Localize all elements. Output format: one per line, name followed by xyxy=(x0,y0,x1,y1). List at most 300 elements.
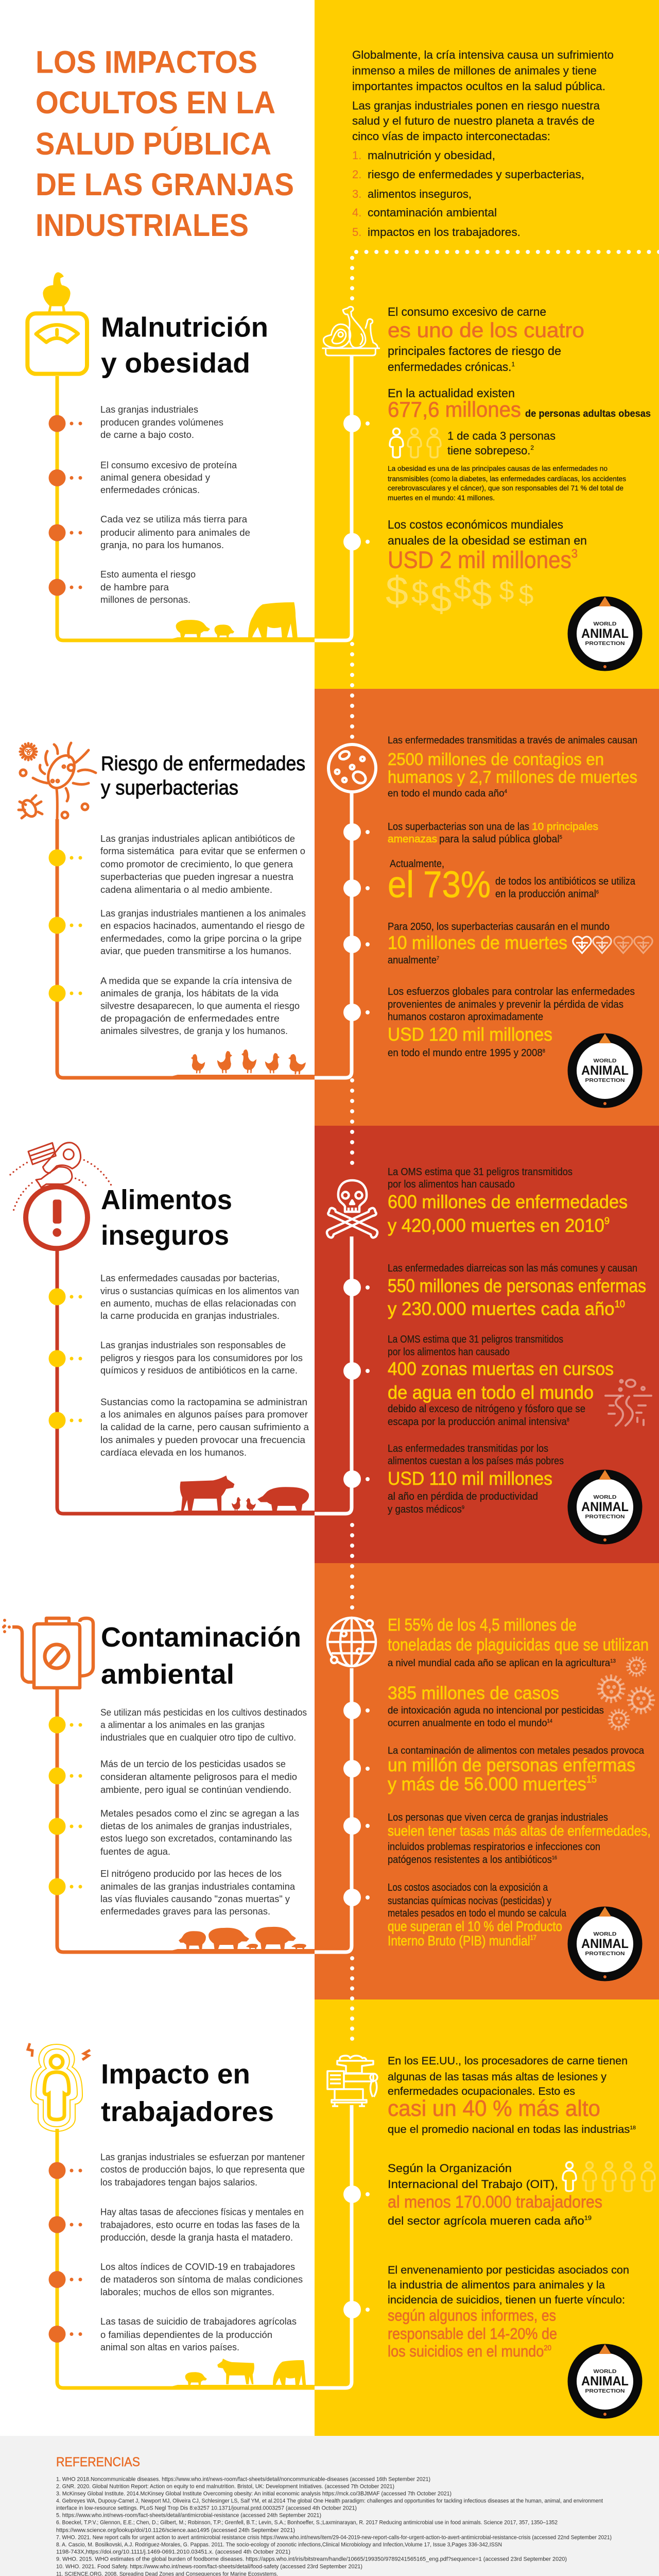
timeline: malnutrition right xyxy=(315,355,352,640)
timeline node xyxy=(343,1279,377,1296)
logo: World Animal Protection xyxy=(567,597,643,671)
point: hunger risk: Esto aumenta el riesgo xyxy=(100,569,196,580)
stat: pesticide suicides: 20 xyxy=(544,2344,551,2352)
references list: 1198-743X,https://doi.org/10.1111/j.1469-0691.2010.03451.x. (accessed 4th October 2021) xyxy=(56,2549,290,2555)
stat: foodborne hazards: 9 xyxy=(604,1216,610,1227)
stat: 73 percent antibiotics: Actualmente, xyxy=(390,858,444,870)
stat: foodborne hazards: 600 millones de enfermedades xyxy=(388,1191,628,1212)
icon: warning circle with food xyxy=(10,1143,112,1248)
timeline: workers right xyxy=(315,2105,352,2388)
dotted connector to section 3 xyxy=(350,1080,354,1173)
stat: ten million deaths xyxy=(388,921,610,966)
farm animals silhouette xyxy=(171,1476,315,1514)
heading: workers xyxy=(101,2059,274,2127)
stat: heavy metal contamination xyxy=(388,1745,644,1794)
point: heavy metals: estos luego son excretados, contaminando las xyxy=(100,1833,292,1843)
stat: cost to poorer countries: al año en pérdida de productividad xyxy=(388,1491,538,1502)
point: low wages: los trabajadores tengan bajos salarios. xyxy=(100,2177,257,2188)
stat: foodborne hazards: y 420,000 muertes en 2010 xyxy=(388,1215,613,1236)
icon: bacteria xyxy=(19,743,96,819)
intro text block: salud y el futuro de nuestro planeta a través de xyxy=(352,114,595,127)
stat: zoonotic infections: 2500 millones de contagios en xyxy=(388,750,604,769)
stat: people living near farms: Los personas que viven cerca de granjas industriales xyxy=(388,1812,608,1823)
title: DE LAS GRANJAS xyxy=(36,167,294,202)
point: foodborne illness: la carne producida en granjas industriales. xyxy=(100,1310,280,1321)
point: low cost meat xyxy=(48,404,223,440)
dotted connector to section 5 xyxy=(350,1958,354,2048)
section 2: disease and superbacteria xyxy=(19,735,652,1108)
point: nitrogen: las vías fluviales causando "zonas muertas" y xyxy=(100,1893,290,1904)
stat: meat processor injuries: algunas de las tasas más altas de lesiones y xyxy=(388,2071,607,2083)
intro numbered list: riesgo de enfermedades y superbacterias, xyxy=(368,168,584,181)
stat: farm worker deaths: 19 xyxy=(584,2214,592,2222)
heading: disease risk: y superbacterias xyxy=(101,777,238,799)
point: nitrogen: El nitrógeno producido por las heces de los xyxy=(100,1868,282,1879)
point: nitrogen: animales de las granjas industriales contamina xyxy=(100,1881,296,1892)
point: low cost meat: Las granjas industriales xyxy=(100,404,198,415)
point: pesticides on feed crops: a alimentar a los animales en las granjas xyxy=(100,1719,265,1730)
stat: cost to poorer countries: 9 xyxy=(462,1505,464,1511)
icon: dollar signs: $ xyxy=(472,574,492,614)
stat: leading risk factor: El consumo excesivo de carne xyxy=(388,305,546,318)
point: ractopamine: la calidad de la carne, pero causan sufrimiento a xyxy=(100,1421,309,1432)
intro text block: cinco vías de impacto interconectadas: xyxy=(352,130,550,143)
point: heavy metals: dietas de los animales de granjas industriales, xyxy=(100,1821,292,1831)
timeline node xyxy=(343,1702,377,1719)
stat: cost of chemical exposure: metales pesados en todo el mundo se calcula xyxy=(388,1908,567,1919)
timeline node xyxy=(343,1362,377,1380)
panel: yellow workers background xyxy=(315,1999,659,2436)
stat: heavy metal contamination: y más de 56.000 muertes xyxy=(388,1773,597,1794)
timeline node xyxy=(343,936,377,953)
stat: top ten threats: para la salud pública global xyxy=(439,834,564,845)
intro numbered list: alimentos inseguros, xyxy=(368,188,472,200)
stat: pesticide suicides: según algunos informes, es xyxy=(388,2306,556,2325)
stat: pesticide use: a nivel mundial cada año se aplican en la agricultura xyxy=(388,1658,615,1669)
heading: disease risk: Riesgo de enfermedades xyxy=(101,753,305,775)
point: physical and mental conditions: trabajadores, esto ocurre en todas las fases de la xyxy=(100,2219,300,2230)
stat: top ten threats: Los superbacterias son una de las xyxy=(388,821,529,833)
point: excess protein: El consumo excesivo de proteína xyxy=(100,460,237,470)
point: foodborne illness xyxy=(48,1273,299,1321)
icon: petri dish xyxy=(328,744,376,792)
logo: World Animal Protection xyxy=(567,2344,643,2418)
logo: World Animal Protection xyxy=(567,1906,643,1981)
timeline: food left xyxy=(57,1250,315,1514)
timeline node xyxy=(343,2185,377,2203)
small obesity note: cerebrovasculares y el cáncer), que son responsables del 71 % del total de xyxy=(388,484,623,492)
stat: global control cost: USD 120 mil millones xyxy=(388,1024,552,1045)
point: physical and mental conditions: producción, desde la granja hasta el matadero. xyxy=(100,2232,293,2243)
timeline node xyxy=(343,1760,377,1777)
intro text block: importantes impactos ocultos en la salud pública. xyxy=(352,80,605,93)
timeline node xyxy=(343,2301,377,2318)
stat: zoonotic infections xyxy=(388,735,637,799)
heading: malnutrition xyxy=(101,312,268,379)
timeline node xyxy=(343,823,377,841)
point: chemical residues: peligros y riesgos para los consumidores por los xyxy=(100,1352,303,1363)
stat: top ten threats: 10 principales xyxy=(532,821,598,833)
stat: obese adults: En la actualidad existen xyxy=(388,386,515,400)
stat: meat processor injuries xyxy=(388,2055,636,2136)
point: hunger risk xyxy=(48,569,196,605)
stat: farm worker deaths: Internacional del Trabajo (OIT), xyxy=(388,2178,558,2191)
timeline node xyxy=(343,1889,377,1906)
icon: virus particles xyxy=(597,1656,655,1731)
stat: cost to poorer countries: y gastos médicos xyxy=(388,1504,467,1515)
stat: cost of chemical exposure: Interno Bruto (PIB) mundial xyxy=(388,1933,556,1948)
icon: dollar signs: $ xyxy=(519,580,534,610)
point: foodborne illness: virus o sustancias químicas en los alimentos van xyxy=(100,1285,299,1296)
point: excess protein: animal genera obesidad y xyxy=(100,472,211,483)
stat: cost to poorer countries xyxy=(388,1443,564,1515)
point: chemical residues: Las granjas industriales son responsables de xyxy=(100,1340,286,1350)
stat: leading risk factor: es uno de los cuatro xyxy=(388,319,584,342)
stat: heavy metal contamination: La contaminación de alimentos con metales pesados provoca xyxy=(388,1745,644,1756)
logo: World Animal Protection: ANIMAL xyxy=(581,2374,629,2388)
pigs silhouette xyxy=(171,1927,315,1952)
logo: World Animal Protection: ANIMAL xyxy=(581,626,629,641)
timeline node xyxy=(343,1817,377,1835)
stat: one in three overweight: 2 xyxy=(530,444,534,451)
point: pesticides on feed crops xyxy=(48,1707,307,1742)
point: chemical residues xyxy=(48,1340,303,1376)
intro text block: Globalmente, la cría intensiva causa un sufrimiento xyxy=(352,48,614,61)
stat: top ten threats xyxy=(388,821,598,845)
point: heavy metals: fuentes de agua. xyxy=(100,1846,170,1857)
section 1: malnutrition xyxy=(27,272,651,671)
title: SALUD PÚBLICA xyxy=(36,126,271,161)
icon: worker in distress xyxy=(28,2043,90,2131)
stat: cost of chemical exposure xyxy=(388,1882,567,1948)
icon: three people xyxy=(390,429,441,457)
stat: 73 percent antibiotics xyxy=(388,858,636,906)
point: antibiotics: Las granjas industriales aplican antibióticos de xyxy=(100,833,295,844)
point: wildlife habitat: animales silvestres, de granja y los humanos. xyxy=(100,1025,288,1036)
point: overcrowding xyxy=(48,908,306,956)
point: hunger risk: millones de personas. xyxy=(100,594,190,605)
point: nitrogen xyxy=(48,1868,296,1917)
stat: acute poisoning cases: 385 millones de casos xyxy=(388,1683,559,1703)
stat: zoonotic infections: 4 xyxy=(505,789,507,794)
stat: top ten threats: 5 xyxy=(560,835,562,840)
stat: dead zones xyxy=(388,1334,614,1428)
stat: dead zones: por los alimentos han causado xyxy=(388,1347,510,1358)
stat: foodborne hazards xyxy=(388,1166,628,1236)
icon: skull and crossbones xyxy=(327,1180,377,1238)
dotted connector to section 4 xyxy=(350,1525,354,1610)
point: antibiotics xyxy=(48,833,305,895)
small obesity note: transmisibles (como la diabetes, las enfermedades cardíacas, los accidentes xyxy=(388,474,626,483)
logo: World Animal Protection xyxy=(567,1033,643,1108)
point: land use: producir alimento para animales de xyxy=(100,527,250,538)
panel: orange pollution background xyxy=(315,1563,659,1999)
farm animals silhouette xyxy=(171,2359,315,2388)
stat: zoonotic infections: humanos y 2,7 millones de muertes xyxy=(388,768,637,786)
stat: zoonotic infections: Las enfermedades transmitidas a través de animales causan xyxy=(388,735,637,746)
stat: pesticide suicides: los suicidios en el mundo xyxy=(388,2342,566,2360)
point: antibiotics: cadena alimentaria o al medio ambiente. xyxy=(100,884,272,895)
heading: malnutrition: y obesidad xyxy=(101,348,250,379)
stat: people living near farms: incluidos problemas respiratorios e infecciones con xyxy=(388,1841,600,1853)
icon: river xyxy=(605,1380,651,1426)
icon: dollar signs: $ xyxy=(430,577,452,620)
stat: obese adults: de personas adultas obesas xyxy=(525,409,651,419)
point: ractopamine xyxy=(48,1396,309,1458)
timeline: workers left xyxy=(57,2129,315,2388)
references list: 3. McKinsey Global Institute. 2014.McKinsey Global Institute Overcoming obesity: An initial economic analysis https://mck.co/3BJtMAF (accessed 7th October 2021) xyxy=(56,2491,452,2497)
stat: cost of chemical exposure: que superan el 10 % del Producto xyxy=(388,1919,562,1934)
references list: 7. WHO. 2021. New report calls for urgent action to avert antimicrobial resistance crisis https://www.who.int/news/item/29-04-2019-new-report-calls-for-urgent-action-to-avert-antimicrobial-resistance-crisis (accessed 22nd September 2021) xyxy=(56,2535,612,2541)
references list: 1. WHO 2018.Noncommunicable diseases. https://www.who.int/news-room/fact-sheets/detail/noncommunicable-diseases (accessed 16th September 2021) xyxy=(56,2476,430,2482)
stat: dead zones: de agua en todo el mundo xyxy=(388,1382,594,1403)
stat: diarrhoeal disease: y 230.000 muertes cada año xyxy=(388,1298,622,1319)
point: wildlife habitat: A medida que se expande la cría intensiva de xyxy=(100,975,292,986)
intro text block xyxy=(352,48,614,143)
intro numbered list: 4. xyxy=(352,206,361,219)
section 5: workers xyxy=(28,2043,655,2418)
point: suicide rates: Las tasas de suicidio de trabajadores agrícolas xyxy=(100,2316,297,2327)
stat: economic cost of obesity: 3 xyxy=(571,547,578,561)
stat: ten million deaths: Para 2050, los superbacterias causarán en el mundo xyxy=(388,921,610,933)
panel: orange disease background xyxy=(315,689,659,1126)
stat: meat processor injuries: enfermedades ocupacionales. Esto es xyxy=(388,2086,575,2097)
icon: meat grinder xyxy=(327,2056,377,2106)
stat: farm worker deaths: Según la Organización xyxy=(388,2162,512,2175)
intro numbered list: 5. xyxy=(352,226,361,239)
stat: economic cost of obesity xyxy=(388,518,587,573)
point: low wages xyxy=(48,2151,305,2188)
stat: people living near farms: patógenos resistentes a los antibióticos xyxy=(388,1854,567,1866)
stat: pesticide suicides: incidencia de suicidios, tienen un fuerte vínculo: xyxy=(388,2294,625,2306)
stat: diarrhoeal disease: 10 xyxy=(615,1299,625,1310)
point: COVID-19: de mataderos son síntoma de malas condiciones xyxy=(100,2274,303,2284)
panel: red unsafe food background xyxy=(315,1126,659,1563)
point: overcrowding: Las granjas industriales mantienen a los animales xyxy=(100,908,306,919)
timeline node xyxy=(343,533,377,550)
stat: dead zones: La OMS estima que 31 peligros transmitidos xyxy=(388,1334,563,1345)
stat: farm worker deaths: del sector agrícola mueren cada año xyxy=(388,2214,571,2227)
stat: pesticide suicides: El envenenamiento por pesticidas asociados con xyxy=(388,2264,629,2276)
references list xyxy=(56,2476,612,2576)
stat: global control cost: en todo el mundo entre 1995 y 2008 xyxy=(388,1047,553,1059)
point: COVID-19: laborales; muchos de ellos son migrantes. xyxy=(100,2286,274,2297)
point: wildlife habitat xyxy=(48,975,300,1036)
point: low wages: costos de producción bajos, lo que representa que xyxy=(100,2164,305,2175)
stat: heavy metal contamination: un millón de personas enfermas xyxy=(388,1754,635,1775)
point: dangerous pesticides xyxy=(48,1758,297,1795)
logo: World Animal Protection: PROTECTION xyxy=(585,641,625,647)
point: nitrogen: enfermedades graves para las personas. xyxy=(100,1906,270,1917)
heading: workers: trabajadores xyxy=(101,2096,274,2127)
small obesity note: La obesidad es una de las principales causas de las enfermedades no xyxy=(388,464,608,472)
icon: chicken on weighing scale xyxy=(27,272,87,374)
stat: dead zones: debido al exceso de nitrógeno y fósforo que se xyxy=(388,1403,585,1415)
references list: 5. https://www.who.int/news-room/fact-sheets/detail/antimicrobial-resistance (accessed 24th September 2021) xyxy=(56,2513,321,2519)
icon: dollar signs: $ xyxy=(453,570,472,606)
point: overcrowding: aviar, que pueden transmitirse a los humanos. xyxy=(100,945,291,956)
point: land use: Cada vez se utiliza más tierra para xyxy=(100,514,248,524)
point: COVID-19: Los altos índices de COVID-19 en trabajadores xyxy=(100,2261,295,2272)
stat: economic cost of obesity: Los costos económicos mundiales xyxy=(388,518,563,531)
stat: obese adults: 677,6 millones xyxy=(388,397,521,421)
heading: malnutrition: Malnutrición xyxy=(101,312,268,343)
heading: unsafe food: Alimentos xyxy=(101,1184,232,1215)
references list: interface in low-resource settings. PLoS Negl Trop Dis 8:e3257 10.1371/journal.pntd.0003257 (accessed 4th October 2021) xyxy=(56,2505,357,2511)
stat: pesticide suicides: responsable del 14-20% de xyxy=(388,2325,557,2343)
timeline node xyxy=(343,415,377,432)
icon: dollar signs: $ xyxy=(499,576,514,606)
intro numbered list: 1. xyxy=(352,149,361,162)
stat: dead zones: 400 zonas muertas en cursos xyxy=(388,1358,614,1379)
intro numbered list xyxy=(352,149,584,239)
stat: 73 percent antibiotics: de todos los antibióticos se utiliza xyxy=(495,876,636,887)
stat: cost to poorer countries: USD 110 mil millones xyxy=(388,1468,552,1489)
stat: pesticide use: El 55% de los 4,5 millones de xyxy=(388,1615,577,1634)
timeline node xyxy=(343,879,377,897)
stat: foodborne hazards: por los alimentos han causado xyxy=(388,1179,515,1190)
references list: 10. WHO. 2021. Food Safety. https://www.who.int/news-room/fact-sheets/detail/food-safety (accessed 23rd September 2021) xyxy=(56,2564,362,2570)
point: ractopamine: Sustancias como la ractopamina se administran xyxy=(100,1396,307,1408)
point: physical and mental conditions: Hay altas tasas de afecciones físicas y mentales en xyxy=(100,2206,304,2217)
chickens silhouette xyxy=(171,1049,315,1078)
point: overcrowding: enfermedades, como la gripe porcina o la gripe xyxy=(100,933,302,944)
stat: leading risk factor: principales factores de riesgo de xyxy=(388,344,561,358)
point: antibiotics: superbacterias que pueden ingresar a nuestra xyxy=(100,871,294,882)
section 4: environmental pollution xyxy=(3,1615,655,1981)
heading: references: REFERENCIAS xyxy=(56,2455,140,2469)
icon: globe network xyxy=(327,1618,376,1666)
stat: ten million deaths: anualmente xyxy=(388,955,442,966)
icon: dollar signs: $ xyxy=(386,568,408,614)
stat: pesticide suicides: la industria de alimentos para animales y la xyxy=(388,2279,605,2291)
point: pesticides on feed crops: industriales que en cualquier otro tipo de cultivo. xyxy=(100,1732,296,1742)
timeline node xyxy=(343,1004,377,1021)
timeline node xyxy=(343,1470,377,1488)
timeline: disease right xyxy=(315,792,352,1078)
logo: World Animal Protection: ANIMAL xyxy=(581,1063,629,1078)
intro numbered list: 2. xyxy=(352,168,361,181)
stat: cost of chemical exposure: 17 xyxy=(530,1934,536,1941)
stat: pesticide suicides xyxy=(388,2264,629,2360)
point: land use: granja, no para los humanos. xyxy=(100,539,224,550)
references list: https://www.science.org/lookup/doi/10.1126/science.aao1495 (accessed 24th September 2021) xyxy=(56,2527,295,2533)
stat: global control cost xyxy=(388,986,635,1059)
point: low cost meat: de carne a bajo costo. xyxy=(100,429,194,440)
point: dangerous pesticides: consideran altamente peligrosos para el medio xyxy=(100,1771,297,1782)
intro text block: Las granjas industriales ponen en riesgo nuestra xyxy=(352,99,600,112)
small obesity note xyxy=(388,464,626,502)
stat: zoonotic infections: en todo el mundo cada año xyxy=(388,788,506,799)
logo: World Animal Protection: PROTECTION xyxy=(585,1514,625,1520)
icon: dollar signs xyxy=(386,568,534,620)
panel: yellow intro and malnutrition background xyxy=(315,0,659,689)
heading: pollution: Contaminación xyxy=(101,1622,301,1653)
heading: unsafe food: inseguros xyxy=(101,1220,229,1251)
stat: meat processor injuries: casi un 40 % más alto xyxy=(388,2096,600,2121)
logo: World Animal Protection: PROTECTION xyxy=(585,1078,625,1083)
title: OCULTOS EN LA xyxy=(36,85,275,120)
logo: World Animal Protection: PROTECTION xyxy=(585,1951,625,1957)
title: INDUSTRIALES xyxy=(36,208,249,243)
stat: one in three overweight: tiene sobrepeso. xyxy=(447,444,531,457)
heading: pollution: ambiental xyxy=(101,1659,234,1690)
logo: World Animal Protection: ANIMAL xyxy=(581,1937,629,1951)
point: excess protein xyxy=(48,460,237,495)
stat: global control cost: Los esfuerzos globales para controlar las enfermedades xyxy=(388,986,635,997)
logo: World Animal Protection: WORLD xyxy=(593,1931,617,1937)
stat: meat processor injuries: 18 xyxy=(630,2125,636,2131)
stat: farm worker deaths: al menos 170.000 trabajadores xyxy=(388,2192,602,2211)
stat: global control cost: provenientes de animales y prevenir la pérdida de vidas xyxy=(388,999,623,1010)
intro numbered list: contaminación ambiental xyxy=(368,206,497,219)
point: COVID-19 xyxy=(48,2261,303,2297)
stat: leading risk factor: enfermedades crónicas. xyxy=(388,360,514,374)
logo: World Animal Protection: PROTECTION xyxy=(585,2388,625,2394)
stat: meat processor injuries: que el promedio nacional en todas las industrias xyxy=(388,2124,619,2136)
stat: acute poisoning cases: de intoxicación aguda no intencional por pesticidas xyxy=(388,1705,604,1716)
stat: obese adults xyxy=(388,386,651,421)
point: antibiotics: forma sistemática para evitar que se enfermen o xyxy=(100,845,305,856)
point: dangerous pesticides: Más de un tercio de los pesticidas usados se xyxy=(100,1758,286,1769)
references list: 9. WHO. 2015. WHO estimates of the global burden of foodborne diseases. https://apps.who.int/iris/bitstream/handle/10665/199350/9789241565165_eng.pdf?sequence=1 (accessed 23rd September 2020) xyxy=(56,2556,567,2563)
references list: 2. GNR. 2020. Global Nutrition Report: Action on equity to end malnutrition. Bristol, UK: Development Initiatives. (accessed 7th October 2021) xyxy=(56,2483,394,2489)
logo: World Animal Protection xyxy=(567,1469,643,1545)
stat: ten million deaths: 10 millones de muertes xyxy=(388,932,567,953)
point: wildlife habitat: animales de granja, los hábitats de la vida xyxy=(100,988,279,998)
small obesity note: muertes en el mundo: 41 millones. xyxy=(388,494,495,502)
point: foodborne illness: en aumento, muchas de ellas relacionadas con xyxy=(100,1298,296,1309)
point: dangerous pesticides: ambiente, pero igual se continúan vendiendo. xyxy=(100,1784,291,1795)
stat: acute poisoning cases: ocurren anualmente en todo el mundo xyxy=(388,1718,558,1729)
stat: pesticide use xyxy=(388,1615,649,1669)
title: LOS IMPACTOS xyxy=(36,44,257,79)
logo: World Animal Protection: ANIMAL xyxy=(581,1500,629,1514)
logo: World Animal Protection: WORLD xyxy=(593,1495,617,1500)
logo: World Animal Protection: WORLD xyxy=(593,1058,617,1064)
stat: foodborne hazards: La OMS estima que 31 peligros transmitidos xyxy=(388,1166,573,1178)
intro numbered list: 3. xyxy=(352,188,361,200)
stat: leading risk factor: 1 xyxy=(511,361,515,368)
stat: 73 percent antibiotics: en la producción animal xyxy=(495,888,604,900)
stat: meat processor injuries: En los EE.UU., los procesadores de carne tienen xyxy=(388,2055,628,2067)
references list: 6. Boeckel, T.P.V.; Glennon, E.E.; Chen, D.; Gilbert, M.; Robinson, T.P.; Grenfell, B.T.; Levin, S.A.; Bonhoeffer, S.;Laxminarayan, R. 2017 Reducing antimicrobial use in food animals. Science 2017, 357, 1350–1352 xyxy=(56,2520,558,2526)
point: land use xyxy=(48,514,250,550)
timeline: pollution left xyxy=(57,1688,315,1952)
timeline: malnutrition left xyxy=(57,376,315,640)
point: antibiotics: como promotor de crecimiento, lo que genera xyxy=(100,858,293,870)
stat: people living near farms xyxy=(388,1812,651,1866)
point: excess protein: enfermedades crónicas. xyxy=(100,484,200,495)
references list: 8. A. Cascio, M. Bosilkovski, A.J. Rodriguez-Morales, G. Pappas. 2011. The socio-ecology of zoonotic infections,Clinical Microbiology and Infection,Volume 17, Issue 3,Pages 336-342,ISSN xyxy=(56,2542,502,2548)
stat: farm worker deaths xyxy=(388,2162,602,2227)
icon: pesticide canister xyxy=(3,1618,93,1688)
stat: heavy metal contamination: 15 xyxy=(586,1774,597,1785)
section 3: unsafe food xyxy=(10,1143,651,1545)
stat: acute poisoning cases: 14 xyxy=(547,1719,552,1724)
point: suicide rates: animal son altas en varios países. xyxy=(100,2342,239,2352)
stat: one in three overweight xyxy=(447,430,556,457)
heading: pollution xyxy=(101,1622,301,1690)
point: ractopamine: cardíaca elevada en los humanos. xyxy=(100,1447,247,1458)
point: foodborne illness: Las enfermedades causadas por bacterias, xyxy=(100,1273,280,1283)
stat: cost of chemical exposure: Los costos asociados con la exposición a xyxy=(388,1882,548,1893)
heading: workers: Impacto en xyxy=(101,2059,250,2090)
intro text block: inmenso a miles de millones de animales y tiene xyxy=(352,64,597,77)
point: suicide rates xyxy=(48,2316,297,2352)
stat: cost to poorer countries: Las enfermedades transmitidas por los xyxy=(388,1443,548,1454)
icon: five people xyxy=(563,2162,655,2191)
